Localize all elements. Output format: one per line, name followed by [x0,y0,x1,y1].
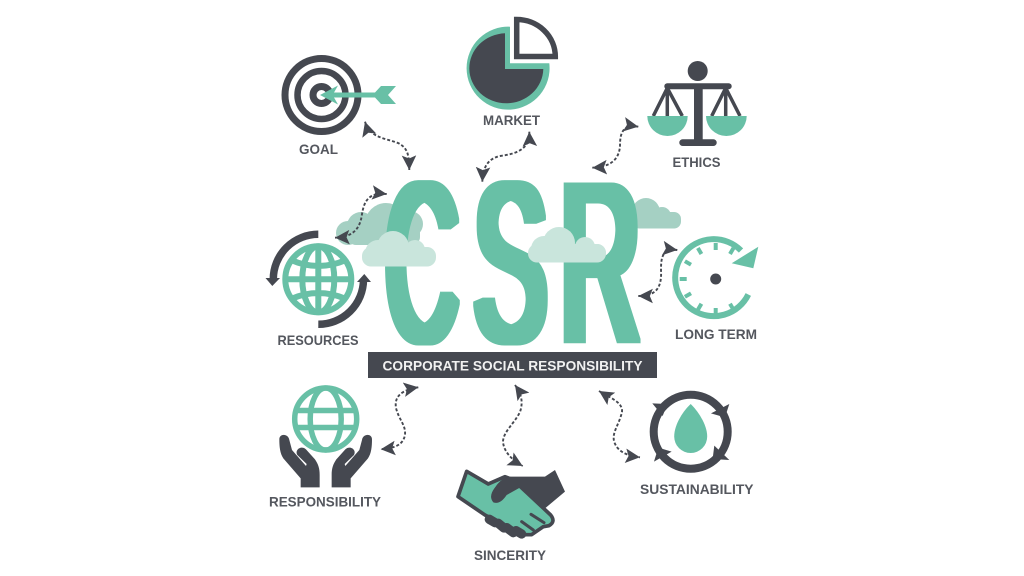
CSR big letters: R [561,135,640,390]
icon: ethics scales [647,61,747,146]
resources label: RESOURCES [278,332,358,348]
icon: responsibility globe in hands [279,388,372,487]
icon: market pie chart [467,20,555,110]
front cloud left [362,231,436,266]
arrow: ethics [592,126,638,168]
icon: sustainability ring and drop [652,395,729,469]
sustainability label: SUSTAINABILITY [640,481,754,497]
icon: long term clock [675,239,758,316]
banner [368,352,657,378]
long term label: LONG TERM [675,326,757,342]
icon: sincerity handshake [458,470,565,535]
CSR big letters: S [474,135,547,390]
arrow: goal [365,122,409,170]
CSR big letters: C [386,136,458,391]
arrow: sustainability [599,391,640,457]
arrow: resources [335,194,387,238]
CSR big letters [386,135,640,391]
ethics label: ETHICS [672,154,720,170]
arrow: responsibility [381,387,418,449]
arrow: sincerity [503,385,523,466]
back cloud right [632,198,681,228]
back cloud left [336,203,423,245]
responsibility label: RESPONSIBILITY [269,494,382,510]
front cloud right [528,227,606,262]
arrow: long term [638,250,677,296]
banner text: CORPORATE SOCIAL RESPONSIBILITY [382,358,643,374]
arrow: market [482,132,529,182]
sincerity label: SINCERITY [474,547,547,563]
goal label: GOAL [299,141,338,157]
market label: MARKET [483,112,540,128]
icon: goal target [285,58,396,132]
icon: resources globe [266,234,371,324]
